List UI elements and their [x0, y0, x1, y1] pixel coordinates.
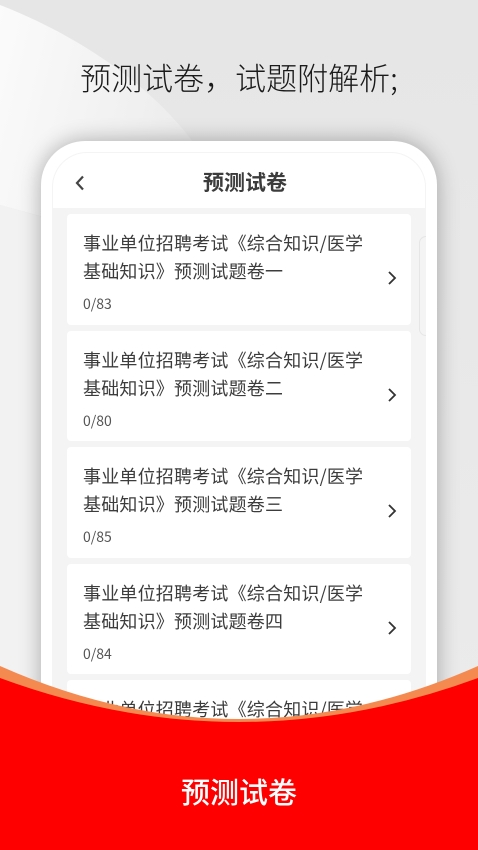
side handle	[419, 236, 426, 336]
title: 预测试卷，试题附解析;	[80, 54, 398, 99]
card 4	[67, 564, 411, 674]
card 1: 0/83	[83, 294, 112, 314]
card 1: 事业单位招聘考试《综合知识/医学	[83, 230, 363, 256]
card 4: 事业单位招聘考试《综合知识/医学	[83, 580, 363, 606]
card 4: 0/84	[83, 644, 112, 664]
card 3: 基础知识》预测试题卷三	[83, 491, 283, 517]
app header	[53, 153, 425, 208]
bottom red banner	[0, 666, 478, 850]
card 2	[67, 331, 411, 441]
card 1: 基础知识》预测试题卷一	[83, 258, 283, 284]
card 5	[67, 680, 411, 791]
back arrow	[76, 176, 84, 190]
card 2: 事业单位招聘考试《综合知识/医学	[83, 347, 363, 373]
card 3: 0/85	[83, 527, 112, 547]
card 2: 基础知识》预测试题卷二	[83, 375, 283, 401]
header title: 预测试卷	[203, 167, 287, 197]
banner label: 预测试卷	[181, 770, 297, 812]
card 3	[67, 447, 411, 558]
card 2: 0/80	[83, 411, 112, 431]
card 3: 事业单位招聘考试《综合知识/医学	[83, 463, 363, 489]
phone mockup	[41, 141, 437, 781]
card 1	[67, 214, 411, 325]
card 5: 事业单位招聘考试《综合知识/医学	[83, 696, 363, 722]
card 4: 基础知识》预测试题卷四	[83, 608, 283, 634]
phone screen	[53, 153, 425, 781]
